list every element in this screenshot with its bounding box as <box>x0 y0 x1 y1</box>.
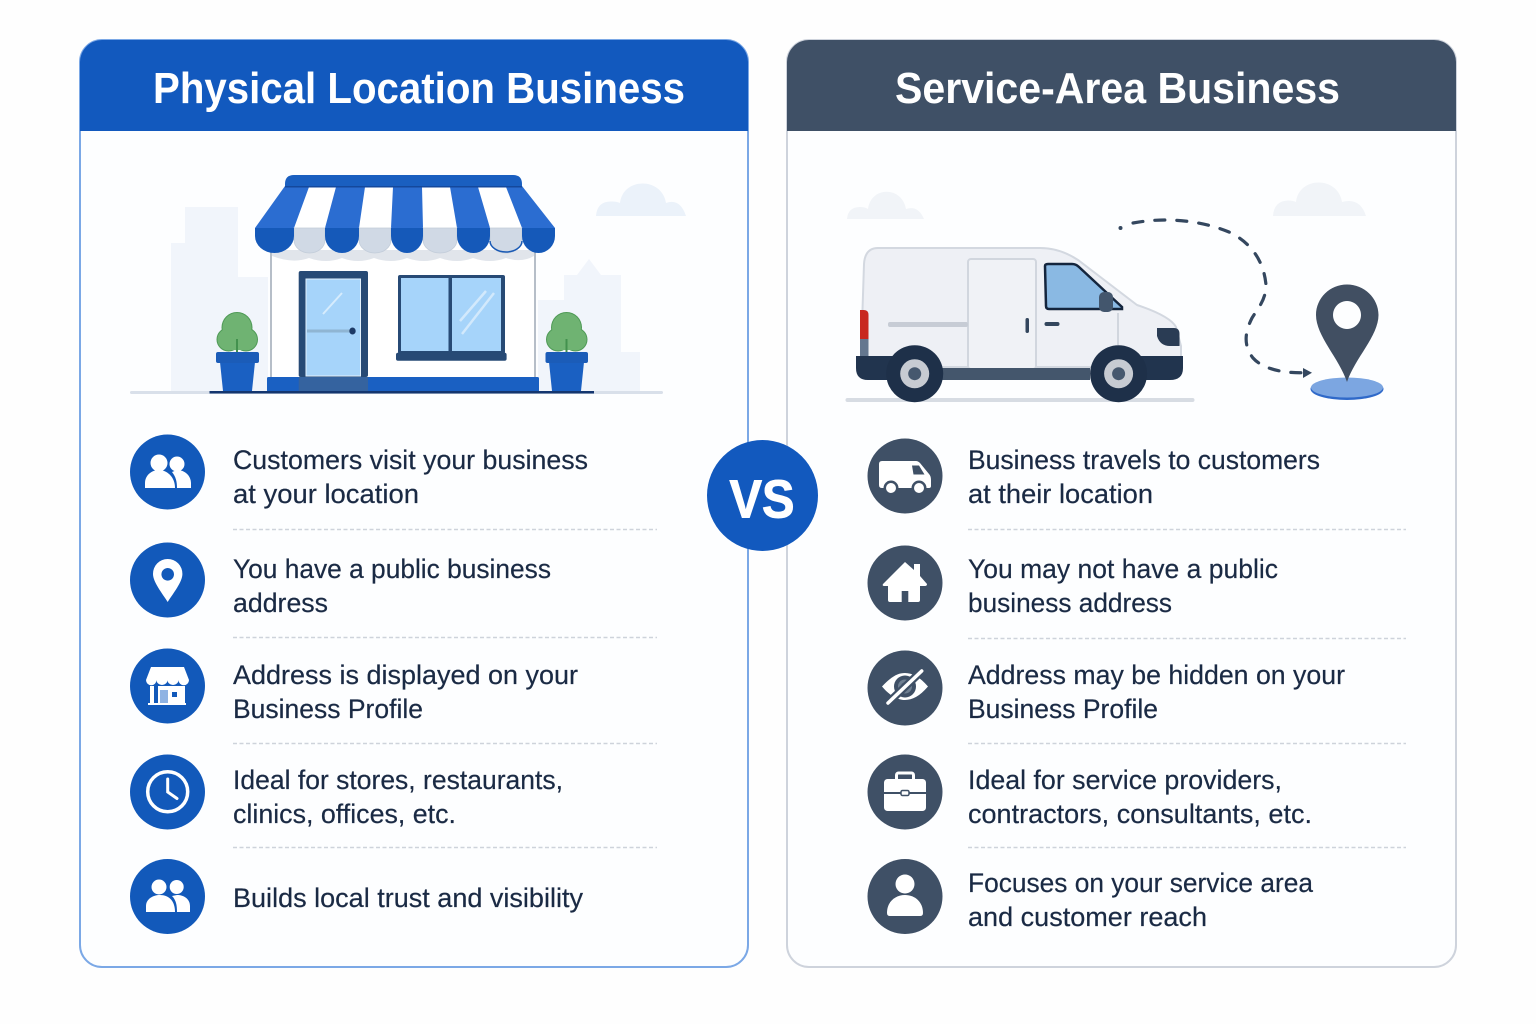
ground line <box>130 391 663 394</box>
headlight <box>1157 328 1180 346</box>
text: service providers <box>968 765 1312 829</box>
plant right <box>546 312 588 391</box>
door <box>299 271 368 377</box>
text: public address <box>233 554 551 618</box>
mirror <box>1099 292 1113 312</box>
building <box>271 245 535 380</box>
icon: store <box>146 667 189 705</box>
panel: physical location business <box>80 40 748 967</box>
location pin <box>1316 284 1378 382</box>
icon: person <box>887 874 923 916</box>
icon: briefcase <box>884 773 926 811</box>
text: business travels: at their location <box>968 479 1153 509</box>
text: business travels <box>968 445 1320 509</box>
row 3: address hidden <box>868 650 1345 726</box>
text: service area <box>968 868 1313 932</box>
row 4: service providers <box>868 754 1312 830</box>
text: local trust: Builds local trust and visibility <box>233 883 584 913</box>
text: may not have address <box>968 554 1278 618</box>
text: may not have address: business address <box>968 588 1172 618</box>
illustration: van and route <box>846 182 1384 402</box>
text: ideal for stores <box>233 765 563 829</box>
ground <box>846 398 1194 402</box>
text: customers visit <box>233 445 588 509</box>
row 5: local trust <box>130 859 584 934</box>
route start dot <box>1118 226 1122 230</box>
header: physical location <box>80 40 748 131</box>
icon: van <box>879 461 931 496</box>
panel: service-area business <box>787 40 1456 967</box>
window <box>396 275 507 361</box>
text: public address: address <box>233 588 328 618</box>
heading: physical location business: Physical Location Business <box>153 64 685 113</box>
text: public address: You have a public business <box>233 554 551 584</box>
icon: hidden eye <box>882 671 928 703</box>
text: ideal for stores: Ideal for stores, restaurants, <box>233 765 563 795</box>
text: business travels: Business travels to customers <box>968 445 1320 475</box>
VS badge <box>707 440 818 551</box>
bumpers and sill <box>856 356 895 380</box>
icon: location pin <box>153 559 182 602</box>
row 1: business travels <box>868 438 1320 514</box>
text: address displayed: Business Profile <box>233 694 423 724</box>
text: may not have address: You may not have a public <box>968 554 1278 584</box>
row 2: may not have address <box>868 546 1278 620</box>
step <box>267 377 539 392</box>
text: address displayed <box>233 660 578 724</box>
row 5: service area <box>868 859 1313 934</box>
text: customers visit: at your location <box>233 479 419 509</box>
icon: customers <box>145 454 191 488</box>
wheel rear <box>886 345 943 402</box>
icon: house <box>883 562 927 602</box>
handles <box>1026 318 1029 333</box>
dashed route <box>1133 220 1302 373</box>
text: address hidden <box>968 660 1345 724</box>
text: address hidden: Address may be hidden on your <box>968 660 1345 690</box>
text: address displayed: Address is displayed on your <box>233 660 578 690</box>
text: ideal for stores: clinics, offices, etc. <box>233 799 456 829</box>
VS badge: VS <box>730 470 794 530</box>
plant left <box>216 312 259 391</box>
wheel front <box>1090 345 1147 402</box>
text: service area: Focuses on your service area <box>968 868 1313 898</box>
text: service area: and customer reach <box>968 902 1207 932</box>
awning shadow <box>272 250 534 261</box>
row 2: public address <box>130 542 551 618</box>
text: customers visit: Customers visit your business <box>233 445 588 475</box>
tail light <box>860 310 868 339</box>
text: service providers: contractors, consultants, etc. <box>968 799 1312 829</box>
pin base <box>1310 378 1384 400</box>
text: address hidden: Business Profile <box>968 694 1158 724</box>
background buildings and cloud <box>171 184 686 392</box>
icon: people <box>146 880 190 912</box>
illustration: storefront <box>130 175 686 394</box>
arrow head <box>1303 368 1312 378</box>
icon: clock <box>148 772 188 812</box>
row 1: customers visit <box>130 434 588 510</box>
text: service providers: Ideal for service providers, <box>968 765 1282 795</box>
clouds <box>847 182 1366 219</box>
header: service-area <box>787 40 1456 131</box>
row 4: ideal for stores <box>130 754 563 830</box>
awning <box>255 175 555 253</box>
heading: service-area business: Service-Area Business <box>895 64 1340 113</box>
van body <box>861 248 1181 367</box>
row 3: address displayed <box>130 648 578 724</box>
van window <box>1045 264 1122 309</box>
